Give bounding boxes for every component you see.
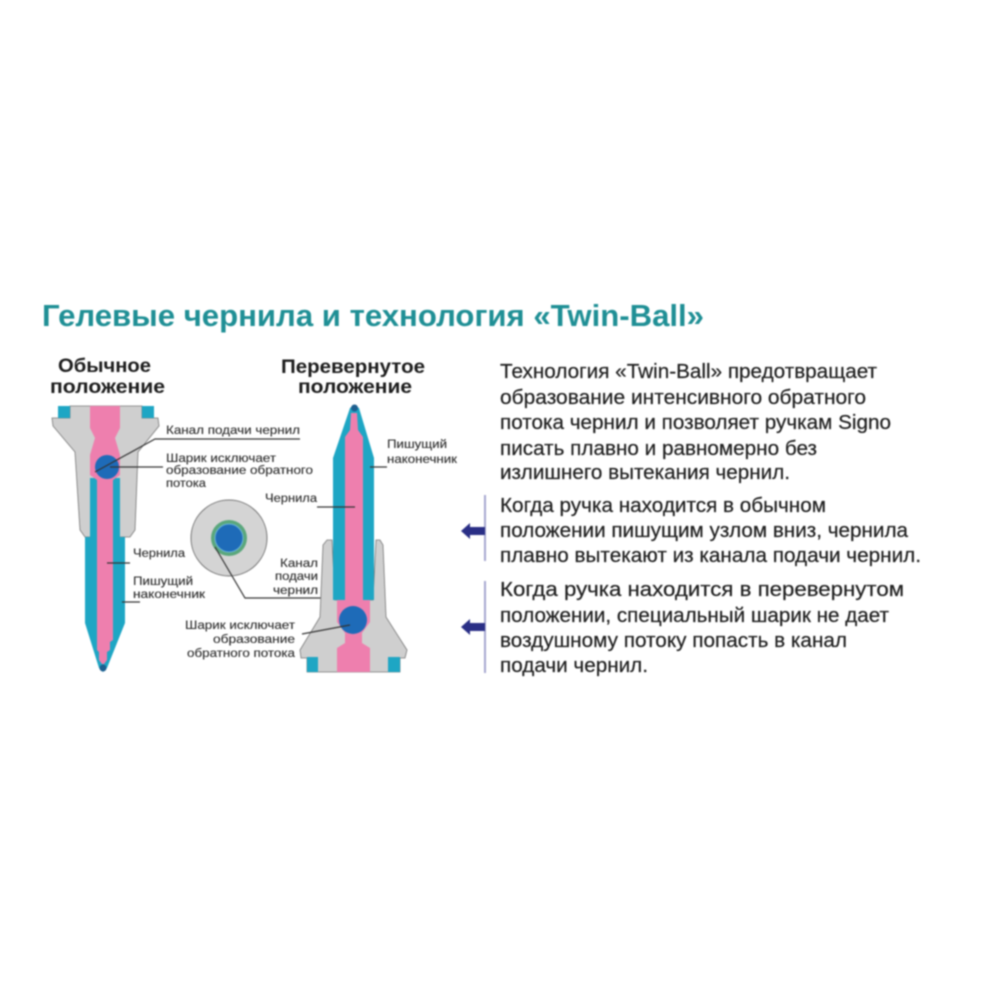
diagram: pen tip in normal position bbox=[52, 406, 300, 672]
collar squares bbox=[307, 657, 400, 672]
labels: inverted position: чернил bbox=[273, 584, 318, 597]
ball bbox=[95, 455, 119, 479]
ink bbox=[90, 406, 120, 664]
collar squares bbox=[58, 406, 154, 418]
gray body bbox=[52, 406, 159, 537]
labels: normal position: Пишущий bbox=[133, 575, 193, 588]
nib bbox=[333, 405, 374, 600]
heading: normal position: Обычное bbox=[58, 356, 151, 377]
heading: inverted position: Перевернутое bbox=[281, 357, 425, 378]
ball bbox=[339, 606, 367, 634]
text block: intro bbox=[500, 361, 891, 484]
leader lines bbox=[95, 439, 300, 472]
divider and arrow: inverted position bbox=[461, 581, 486, 673]
title: Гелевые чернила и технология «Twin-Ball» bbox=[42, 298, 704, 333]
labels: inverted position: Шарик исключает bbox=[185, 619, 296, 632]
text block: normal position: плавно вытекают из канала подачи чернил. bbox=[500, 545, 921, 567]
text block: intro: потока чернил и позволяет ручкам Signo bbox=[500, 412, 891, 434]
labels: normal position: Канал подачи чернил bbox=[166, 424, 300, 437]
text block: inverted position: воздушному потоку попасть в канал bbox=[500, 630, 847, 652]
labels: inverted position bbox=[185, 438, 458, 660]
labels: inverted position: образование bbox=[213, 633, 295, 646]
heading: normal position: положение bbox=[50, 377, 165, 398]
text block: inverted position: положении, специальный шарик не дает bbox=[500, 605, 889, 627]
heading: normal position bbox=[50, 356, 165, 398]
text block: inverted position bbox=[500, 579, 904, 677]
labels: inverted position: подачи bbox=[275, 570, 318, 583]
text block: inverted position: Когда ручка находится в перевернутом bbox=[500, 579, 904, 601]
diagram: pen tip in inverted position bbox=[300, 404, 407, 672]
labels: normal position: Чернила bbox=[133, 547, 186, 560]
ink bbox=[337, 413, 370, 672]
text block: intro: писать плавно и равномерно без bbox=[500, 438, 817, 460]
writing tip bbox=[100, 664, 106, 672]
divider and arrow: normal position bbox=[461, 495, 486, 561]
text block: normal position: Когда ручка находится в обычном bbox=[500, 495, 826, 517]
diagram: cross-section bbox=[191, 500, 370, 620]
text block: inverted position: подачи чернил. bbox=[500, 655, 648, 677]
labels: inverted position: Канал bbox=[280, 557, 318, 570]
heading: inverted position bbox=[281, 357, 425, 398]
labels: inverted position: обратного потока bbox=[187, 647, 296, 660]
nib bbox=[85, 478, 125, 672]
labels: inverted position: наконечник bbox=[387, 453, 458, 466]
labels: normal position: образование обратного bbox=[166, 464, 313, 477]
labels: normal position: наконечник bbox=[133, 588, 206, 601]
labels: inverted position: Чернила bbox=[265, 492, 318, 505]
labels: normal position: потока bbox=[166, 477, 207, 490]
labels: normal position bbox=[133, 424, 313, 601]
leader lines bbox=[302, 625, 350, 634]
text block: normal position bbox=[500, 495, 921, 567]
text block: intro: образование интенсивного обратного bbox=[500, 387, 866, 409]
gray body bbox=[300, 540, 407, 672]
heading: inverted position: положение bbox=[298, 377, 412, 398]
writing tip bbox=[351, 404, 358, 412]
text block: intro: Технология «Twin-Ball» предотвращает bbox=[500, 361, 877, 383]
labels: inverted position: Пишущий bbox=[387, 438, 447, 451]
text block: intro: излишнего вытекания чернил. bbox=[500, 462, 790, 484]
text block: normal position: положении пишущим узлом вниз, чернила bbox=[500, 520, 909, 542]
labels: normal position: Шарик исключает bbox=[166, 452, 277, 465]
